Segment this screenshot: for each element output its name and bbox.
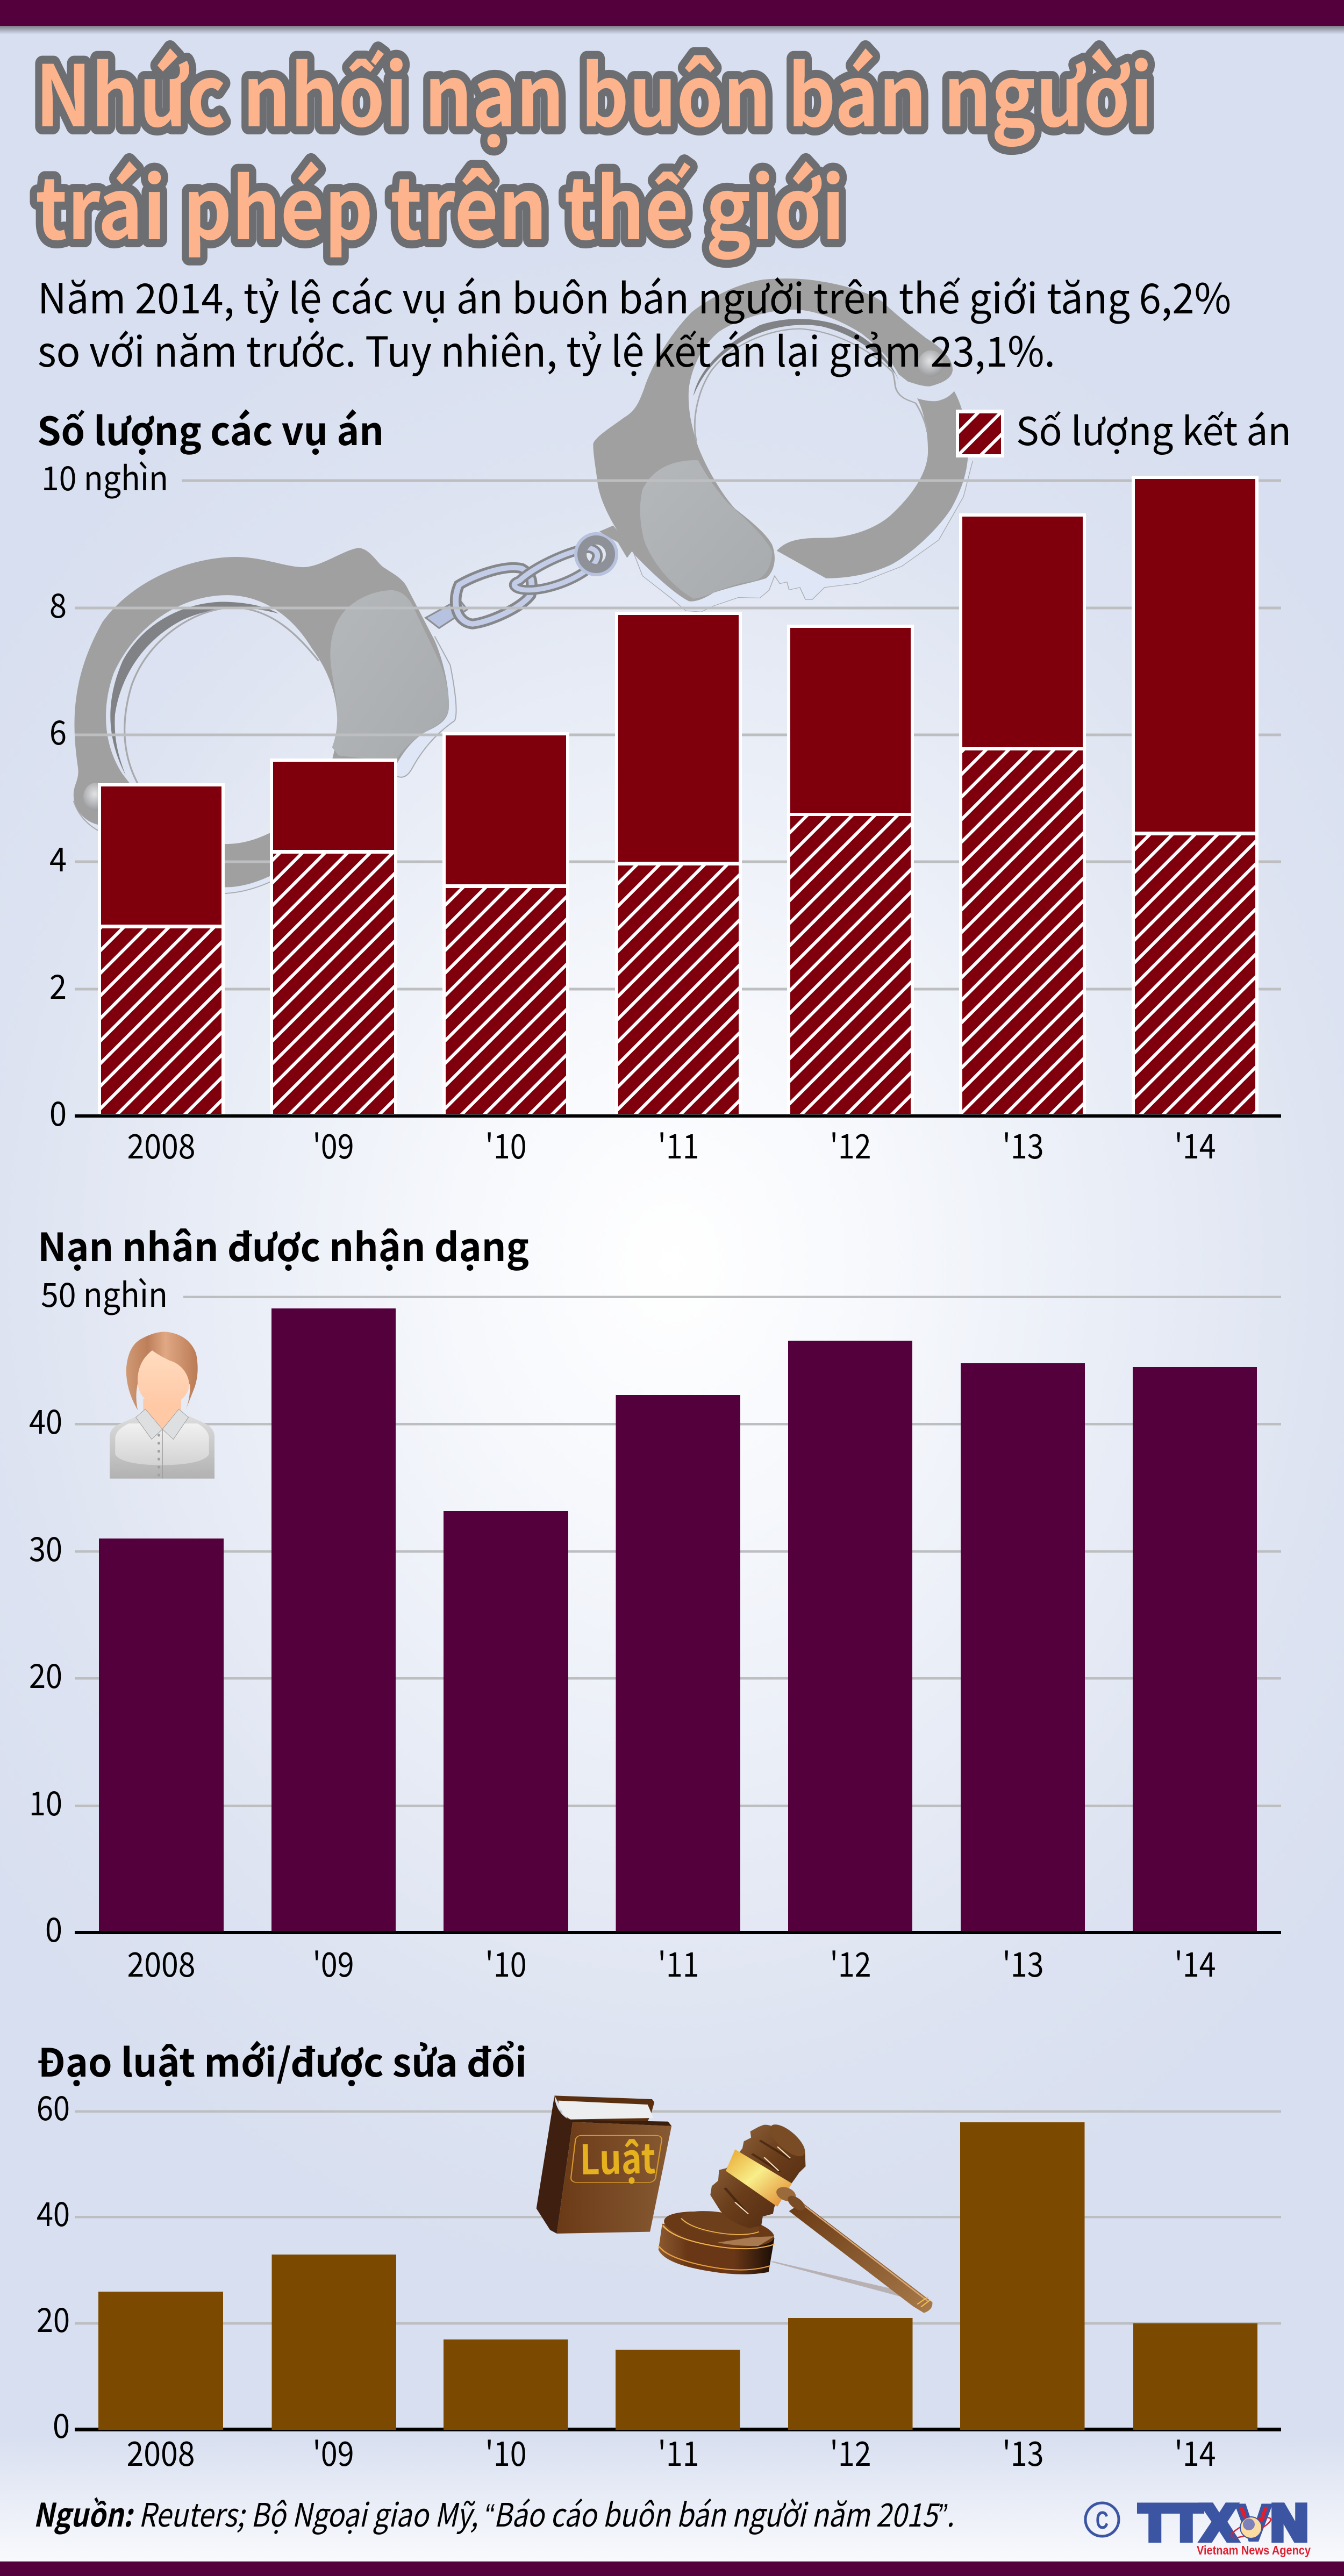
chart 2 x axis labels: '10: [485, 1938, 527, 1987]
chart 2 gridlines: [75, 1296, 1281, 1807]
bar 2009: [270, 759, 397, 1114]
intro text: so với năm trước. Tuy nhiên, tỷ lệ kết án lại giảm 23,1%.: [38, 319, 1055, 379]
chart 2 x axis labels: [127, 1938, 1216, 1987]
legend: Số lượng kết án: [1016, 400, 1291, 456]
heading: victims: Nạn nhân được nhận dạng: [38, 1216, 529, 1272]
icon: law book: [537, 2095, 671, 2234]
chart 2 x axis labels: 2008: [127, 1938, 196, 1987]
bar 2014: [1132, 476, 1259, 1114]
chart 1 y axis labels: 10 nghìn: [41, 452, 168, 500]
chart 1 x axis labels: '09: [313, 1120, 354, 1169]
chart 1 baseline: [75, 1114, 1281, 1118]
chart 1 x axis labels: [127, 1120, 1216, 1169]
chart 2 y axis labels: 0: [45, 1903, 62, 1951]
chart 3 x axis labels: '11: [658, 2427, 699, 2476]
chart 3 x axis labels: [127, 2427, 1216, 2476]
chart 1 x axis labels: '11: [658, 1120, 699, 1169]
chart 3 x axis labels: '13: [1002, 2427, 1044, 2476]
chart 1 x axis labels: 2008: [127, 1120, 196, 1169]
heading: laws: Đạo luật mới/được sửa đổi: [37, 2031, 527, 2088]
chart 3 x axis labels: '09: [313, 2427, 354, 2476]
chain: [426, 548, 597, 628]
chart 1: stacked bars: [98, 476, 1259, 1114]
bar 2012: [787, 625, 914, 1114]
chart 2 x axis labels: '12: [830, 1938, 871, 1987]
chart 3 x axis labels: '14: [1174, 2427, 1216, 2476]
copyright mark: [1085, 2503, 1119, 2536]
chart 3: bars: [98, 2122, 1257, 2430]
icon: gavel: [657, 2121, 932, 2313]
chart 2: bars: [99, 1308, 1257, 1932]
title: trái phép trên thế giới: [35, 142, 845, 264]
logo: TTXVN: [1085, 2494, 1311, 2557]
chart 1 y axis labels: 4: [49, 833, 67, 881]
chart 1 y axis labels: 8: [49, 579, 67, 627]
chart 2 baseline: [75, 1931, 1281, 1934]
chart 1 x axis labels: '10: [485, 1120, 527, 1169]
chart 3 baseline: [75, 2428, 1281, 2431]
intro text: Năm 2014, tỷ lệ các vụ án buôn bán người trên thế giới tăng 6,2%: [38, 266, 1231, 326]
chart 2 y axis labels: [29, 1268, 168, 1951]
left cuff: [74, 548, 456, 893]
chart 2 x axis labels: '11: [658, 1938, 699, 1987]
icon: law book: Luật: [579, 2126, 656, 2186]
chart 2 y axis labels: 30: [29, 1522, 62, 1571]
title: Nhức nhối nạn buôn bán người: [35, 29, 1153, 151]
chart 2 y axis labels: 50 nghìn: [41, 1268, 168, 1316]
chart 1 y axis labels: 6: [49, 706, 67, 754]
agency name: Vietnam News Agency: [1197, 2543, 1311, 2557]
chart 2 y axis labels: 20: [29, 1649, 62, 1698]
chart 3 x axis labels: '10: [485, 2427, 527, 2476]
chart 3 y axis labels: 0: [53, 2399, 70, 2448]
chart 1 y axis labels: 0: [49, 1087, 67, 1135]
chart 3 gridlines: [75, 2110, 1281, 2324]
top bar: [0, 0, 1344, 34]
chart 2 y axis labels: 10: [29, 1777, 62, 1825]
chart 3 x axis labels: '12: [830, 2427, 871, 2476]
chart 3 y axis labels: 20: [37, 2293, 70, 2342]
chart 3 y axis labels: 60: [37, 2081, 70, 2130]
chart 1 gridlines: [75, 480, 1281, 990]
right cuff: [593, 278, 973, 612]
chart 1 y axis labels: 2: [49, 960, 67, 1008]
title: [35, 29, 1153, 264]
icon: woman: [110, 1332, 215, 1479]
heading: cases: Số lượng các vụ án: [37, 400, 384, 456]
chart 3 x axis labels: 2008: [127, 2427, 195, 2476]
globe: [1229, 2514, 1273, 2541]
chart 3 y axis labels: 40: [37, 2187, 70, 2236]
chart 1 y axis labels: [41, 452, 168, 1135]
copyright mark: C: [1096, 2506, 1109, 2534]
bar 2010: [442, 732, 569, 1114]
chart 1 x axis labels: '13: [1002, 1120, 1044, 1169]
bar 2013: [959, 513, 1086, 1114]
icon: handcuffs: [74, 278, 973, 893]
chart 2 y axis labels: 40: [29, 1395, 62, 1443]
bar 2011: [615, 612, 742, 1114]
chart 1 x axis labels: '14: [1174, 1120, 1216, 1169]
intro text: [38, 266, 1231, 379]
chart 3 y axis labels: [37, 2081, 70, 2448]
bottom bar: [0, 2561, 1344, 2576]
chart 2 x axis labels: '14: [1174, 1938, 1216, 1987]
wordmark: TTXVN: [1139, 2494, 1308, 2551]
chart 2 x axis labels: '09: [313, 1938, 354, 1987]
bar 2008: [98, 783, 225, 1114]
source: Nguồn: Reuters; Bộ Ngoại giao Mỹ, “Báo cáo buôn bán người năm 2015”.: [33, 2489, 954, 2536]
chart 2 x axis labels: '13: [1002, 1938, 1044, 1987]
chart 1 x axis labels: '12: [830, 1120, 871, 1169]
